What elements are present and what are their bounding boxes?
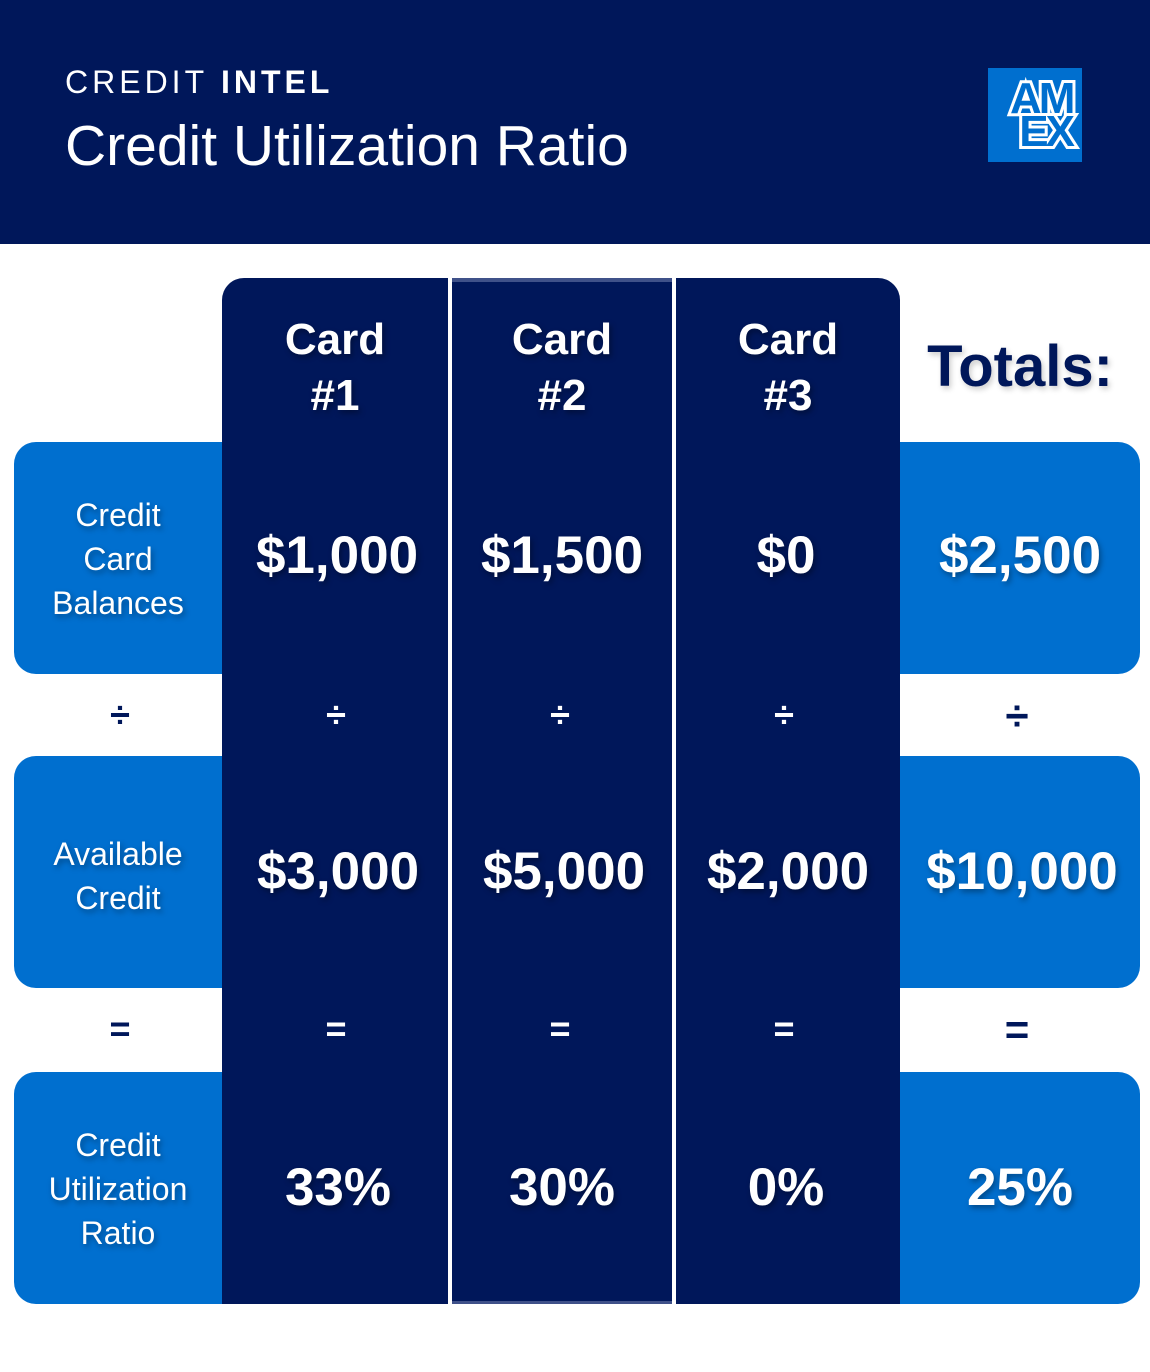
text: $5,000 — [483, 842, 645, 901]
text: $10,000 — [926, 842, 1118, 901]
row backgrounds — [14, 442, 1140, 674]
text: 30% — [509, 1158, 615, 1217]
text: Card — [512, 315, 612, 364]
text: Credit — [75, 1127, 161, 1163]
equals operators: = — [109, 1008, 131, 1049]
text: Credit — [75, 880, 161, 916]
text: ÷ — [550, 694, 570, 735]
divide operators: ÷ — [110, 694, 130, 735]
header — [0, 0, 1150, 244]
text: = — [773, 1008, 795, 1049]
text: Ratio — [81, 1215, 155, 1251]
column headers: Card — [285, 315, 385, 364]
row labels — [52, 497, 188, 621]
text: $2,000 — [707, 842, 869, 901]
text: $0 — [757, 526, 815, 585]
text: ÷ — [774, 694, 794, 735]
column headers: #1 — [311, 371, 359, 420]
brand line: CREDIT INTEL — [65, 64, 333, 100]
ratio row: 33% — [285, 1158, 391, 1217]
text: 25% — [967, 1158, 1073, 1217]
text: $2,500 — [939, 526, 1101, 585]
text: #2 — [538, 371, 586, 420]
text: $1,500 — [481, 526, 643, 585]
logo: EX — [1019, 107, 1072, 156]
balances row: $1,000 — [256, 526, 418, 585]
text: ÷ — [326, 694, 346, 735]
text: = — [325, 1008, 347, 1049]
text: = — [1005, 1006, 1029, 1053]
row labels: Credit — [75, 497, 161, 533]
logo — [988, 68, 1082, 162]
totals heading: Totals: — [927, 334, 1113, 399]
row labels: Balances — [52, 585, 184, 621]
text: Available — [53, 836, 183, 872]
columns — [222, 278, 448, 1304]
row labels: Card — [83, 541, 153, 577]
text: Card — [738, 315, 838, 364]
text: ÷ — [1005, 692, 1029, 739]
text: #3 — [764, 371, 812, 420]
column headers — [285, 315, 386, 420]
logo: AM — [1010, 74, 1072, 123]
title: Credit Utilization Ratio — [65, 114, 629, 178]
text: 0% — [748, 1158, 824, 1217]
text: = — [549, 1008, 571, 1049]
text: Utilization — [49, 1171, 187, 1207]
available row: $3,000 — [257, 842, 419, 901]
